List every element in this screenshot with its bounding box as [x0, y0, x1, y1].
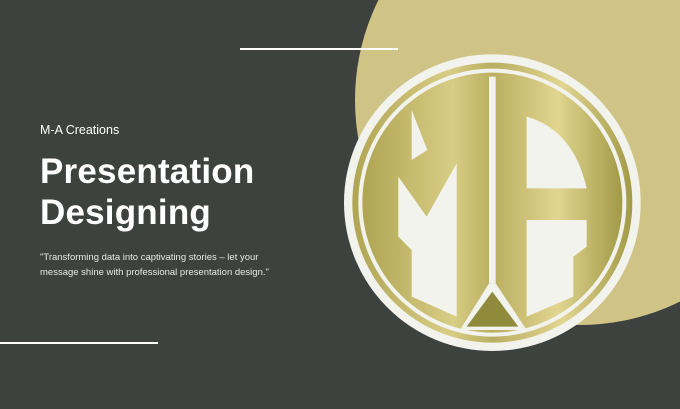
heading: Designing [40, 193, 211, 232]
logo [344, 54, 641, 351]
heading: Presentation [40, 152, 254, 191]
tagline [40, 252, 269, 278]
background tan circle [355, 0, 680, 325]
bottom line [0, 342, 158, 344]
top line [240, 48, 398, 50]
heading [40, 152, 254, 232]
tagline: message shine with professional presentation design." [40, 267, 269, 278]
middle divider and chevron [460, 77, 527, 330]
tagline: "Transforming data into captivating stories – let your [40, 252, 258, 263]
M cutout [398, 110, 457, 317]
A counters [527, 117, 587, 317]
brand name: M-A Creations [40, 123, 119, 137]
